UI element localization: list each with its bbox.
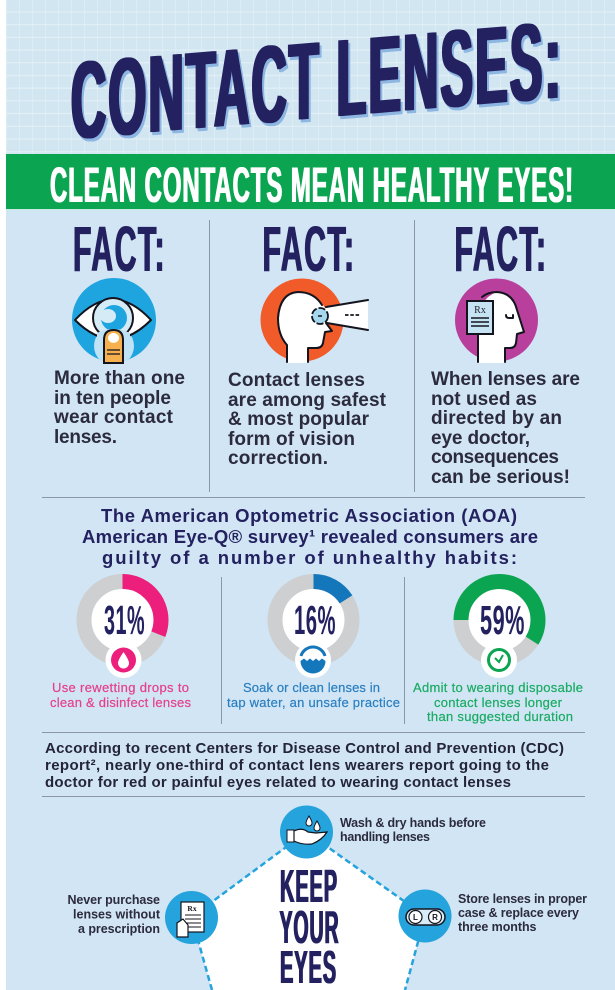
text: fact 1: in ten people xyxy=(54,388,171,409)
text: fact 1: lenses. xyxy=(54,427,117,448)
text: fact 3: not used as xyxy=(431,389,537,410)
label: store lenses: three months xyxy=(458,920,537,934)
icon: prescription in hand: Rx xyxy=(187,904,197,913)
icon: drop xyxy=(106,642,142,678)
text: fact 3: eye doctor, xyxy=(431,428,530,449)
label: wash hands xyxy=(340,816,486,844)
donut chart: 31% xyxy=(50,582,192,710)
panel: keep your eyes pentagon: YOUR xyxy=(280,901,340,953)
text: fact 1 xyxy=(53,368,185,448)
CDC paragraph: report², nearly one-third of contact lens wearers report going to the xyxy=(45,757,549,774)
text: fact 3: can be serious! xyxy=(431,467,570,488)
caption: 59%: Admit to wearing disposable xyxy=(413,680,583,695)
icon: lens case xyxy=(398,890,452,942)
icon: head with prescription xyxy=(455,278,538,363)
text: fact 2: are among safest xyxy=(228,390,387,411)
text: fact 3: When lenses are xyxy=(431,369,580,390)
icon: head with prescription: Rx xyxy=(474,305,486,316)
heading: keep your eyes xyxy=(280,860,340,990)
survey heading: The American Optometric Association (AOA) xyxy=(101,505,517,526)
survey heading xyxy=(82,505,538,568)
text: fact 3: consequences xyxy=(431,447,559,468)
caption: 16%: tap water, an unsafe practice xyxy=(227,695,400,710)
caption: 59% xyxy=(413,680,583,724)
CDC paragraph xyxy=(45,740,564,791)
panel: fact 2: FACT: xyxy=(262,213,356,285)
icon: water basin xyxy=(295,642,331,678)
CDC paragraph: According to recent Centers for Disease Control and Prevention (CDC) xyxy=(45,740,564,757)
caption: 31% xyxy=(50,680,192,710)
label: wash hands: handling lenses xyxy=(340,830,430,844)
icon: lens case: R xyxy=(432,913,438,922)
donut chart: 16% xyxy=(227,582,400,710)
panel: fact 1: FACT: xyxy=(73,213,166,285)
label: never purchase: lenses without xyxy=(73,908,161,922)
label: store lenses xyxy=(458,892,587,934)
caption: 16%: Soak or clean lenses in xyxy=(243,680,380,695)
caption: 31%: Use rewetting drops to xyxy=(52,680,189,695)
donut chart: 59%: 59% xyxy=(480,597,525,643)
text: fact 2 xyxy=(228,370,387,469)
label: store lenses: Store lenses in proper xyxy=(458,892,587,906)
label: never purchase xyxy=(68,893,161,936)
donut chart: 16%: 16% xyxy=(294,597,336,643)
panel: keep your eyes pentagon xyxy=(165,806,452,990)
caption: 59%: contact lenses longer xyxy=(434,695,563,710)
text: fact 3 xyxy=(431,369,580,488)
caption: 59%: than suggested duration xyxy=(427,709,573,724)
text: fact 2: form of vision xyxy=(228,429,355,450)
icon: head with contact lens beam xyxy=(260,278,368,363)
icon: clock xyxy=(481,642,517,678)
survey heading: American Eye-Q® survey¹ revealed consumers are xyxy=(82,526,538,547)
icon: washing hands xyxy=(280,806,333,858)
caption: 31%: clean & disinfect lenses xyxy=(50,695,192,710)
panel: fact 2 xyxy=(228,213,387,469)
text: fact 3: directed by an xyxy=(431,408,562,429)
caption: 16% xyxy=(227,680,400,710)
CDC paragraph: doctor for red or painful eyes related to wearing contact lenses xyxy=(45,774,511,791)
donut chart: 31%: 31% xyxy=(104,597,145,643)
label: store lenses: case & replace every xyxy=(458,906,579,920)
panel: fact 1 xyxy=(53,213,185,448)
label: never purchase: a prescription xyxy=(78,922,160,936)
text: fact 1: wear contact xyxy=(53,407,174,428)
text: fact 1: More than one xyxy=(54,368,185,389)
text: fact 2: & most popular xyxy=(228,409,370,430)
survey heading: guilty of a number of unhealthy habits: xyxy=(102,547,517,568)
panel: keep your eyes pentagon: KEEP xyxy=(280,860,338,912)
panel: fact 3 xyxy=(431,213,580,488)
icon: lens case: L xyxy=(413,913,418,922)
icon: prescription in hand xyxy=(165,891,218,944)
text: fact 2: correction. xyxy=(228,448,328,469)
donut chart: 59% xyxy=(413,582,583,724)
label: never purchase: Never purchase xyxy=(68,893,160,907)
icon: eye and finger xyxy=(72,278,156,366)
text: fact 2: Contact lenses xyxy=(228,370,365,391)
label: wash hands: Wash & dry hands before xyxy=(340,816,486,830)
